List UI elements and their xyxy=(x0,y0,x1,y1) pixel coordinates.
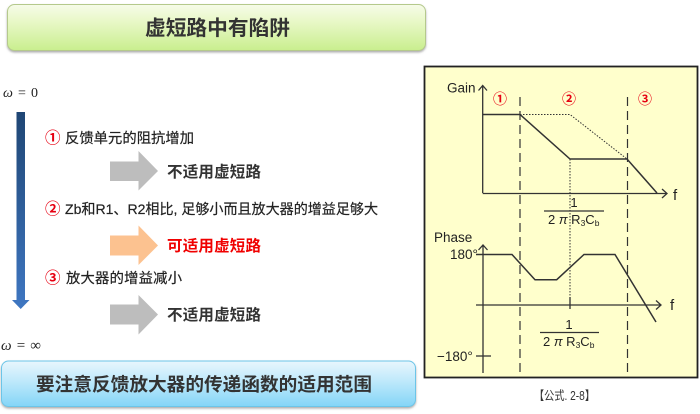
result 2 text: 可适用虚短路 xyxy=(167,236,261,255)
gain chart: Gain xyxy=(447,80,476,96)
phase chart: 2 π R xyxy=(543,334,576,349)
gain chart: ③ xyxy=(638,91,652,107)
bottom takeaway banner: 要注意反馈放大器的传递函数的适用范围 xyxy=(36,374,372,395)
label: omega zero: ω = 0 xyxy=(3,86,38,101)
gain chart: f xyxy=(673,187,678,204)
phase chart: b xyxy=(590,340,595,350)
gain chart: ② xyxy=(562,91,576,107)
step 3 text: ③ xyxy=(45,269,61,287)
region dividers xyxy=(520,97,628,374)
gain chart: b xyxy=(595,218,600,228)
phase chart: 180° xyxy=(450,247,478,262)
title banner xyxy=(8,4,426,50)
result 3 text: 不适用虚短路 xyxy=(167,305,261,324)
panel: gain and phase charts xyxy=(424,66,698,378)
phase chart: 3 xyxy=(576,340,581,350)
result 1 text: 不适用虚短路 xyxy=(167,162,261,181)
caption: 【公式. 2-8】 xyxy=(534,389,595,403)
gain chart: ① xyxy=(493,91,507,107)
gain chart: 2 π R xyxy=(548,212,581,227)
arrow: step 3 result gray xyxy=(110,295,158,334)
bottom takeaway banner xyxy=(2,361,416,406)
gain chart: 3 xyxy=(581,218,586,228)
arrow: step 2 result orange xyxy=(110,226,158,265)
frequency direction arrow xyxy=(12,112,30,309)
phase chart: C xyxy=(580,334,590,349)
arrow: step 1 result gray xyxy=(110,151,158,190)
phase chart: f xyxy=(670,297,675,314)
gain chart: C xyxy=(585,212,595,227)
step 2 text: ② xyxy=(45,200,61,218)
step 1 text: 反馈单元的阻抗增加 xyxy=(65,130,194,147)
step 3 text: 放大器的增益减小 xyxy=(66,270,182,287)
title banner: 虚短路中有陷阱 xyxy=(145,17,290,40)
gain chart: 1 xyxy=(570,195,578,210)
panel background xyxy=(424,66,698,378)
label: omega infinity: ω = ∞ xyxy=(1,338,41,354)
phase chart: −180° xyxy=(437,349,473,364)
step 1 text: ① xyxy=(45,129,61,147)
phase chart: Phase xyxy=(434,230,472,245)
phase chart: 1 xyxy=(565,317,573,332)
phase chart xyxy=(434,230,675,373)
gain chart xyxy=(447,80,678,228)
step 2 text: Zb和R1、R2相比, 足够小而且放大器的增益足够大 xyxy=(65,202,378,218)
